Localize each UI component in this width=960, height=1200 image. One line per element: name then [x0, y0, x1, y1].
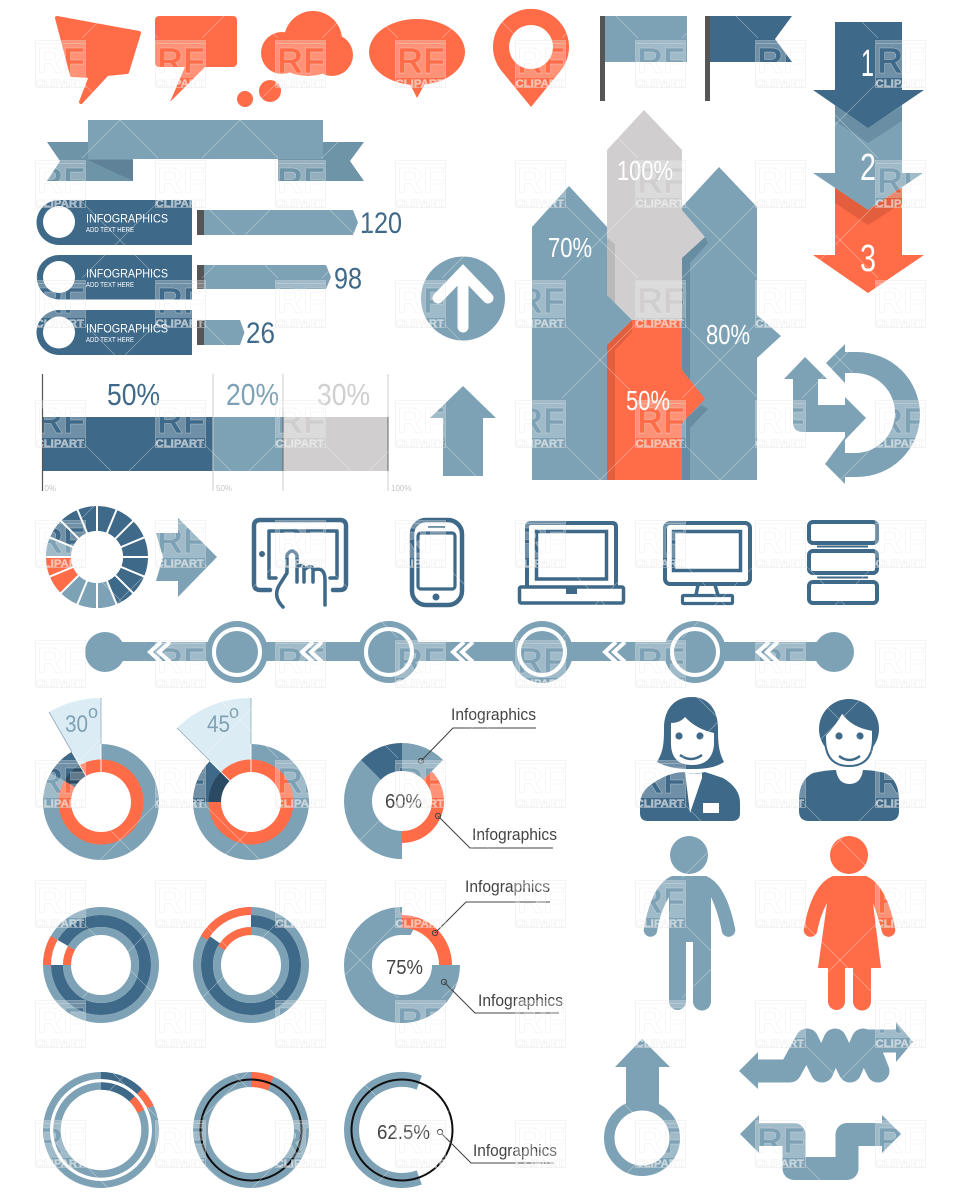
- icon: thought cloud: [237, 11, 353, 107]
- icon: wavy double arrow: [739, 1022, 913, 1089]
- numbered down arrows: 1: [861, 43, 874, 85]
- data row 26: ADD TEXT HERE: [86, 337, 134, 344]
- icon: dark flag: [705, 16, 792, 101]
- donut: 60% with callouts: Infographics: [451, 705, 536, 724]
- numbered down arrows: 3: [860, 238, 876, 280]
- stacked percentage bar: 50%: [216, 484, 232, 493]
- icon: woman avatar: [640, 697, 740, 821]
- icon: circled up arrow: [421, 256, 505, 340]
- donut: 30 degree wedge: o: [88, 702, 98, 722]
- icon: stepped double arrow: [740, 1115, 901, 1168]
- data row 98: INFOGRAPHICS: [86, 266, 168, 280]
- data row 98: ADD TEXT HERE: [86, 282, 134, 289]
- data row 120: ADD TEXT HERE: [86, 227, 134, 234]
- donut: triple ring left segment: [47, 911, 155, 1019]
- stacked percentage bar: 50%: [107, 377, 160, 412]
- icon: rectangular speech bubble: [155, 16, 237, 102]
- data row 120: INFOGRAPHICS: [86, 212, 168, 226]
- icon: server stack: [809, 522, 877, 603]
- icon: arrow with ring: [609, 1039, 675, 1171]
- numbered down arrows: [813, 22, 924, 293]
- stacked percentage bar: 30%: [317, 377, 370, 412]
- percentage arrows chart: 80%: [706, 319, 750, 350]
- icon: solid up arrow: [430, 386, 496, 476]
- donut: 75% with callouts: 75%: [386, 957, 423, 979]
- icon: laptop: [520, 523, 624, 603]
- stacked percentage bar: [42, 374, 411, 493]
- icon: curved and elbow arrows: [784, 344, 920, 484]
- percentage arrows chart: [532, 110, 781, 480]
- data row 120: [36, 200, 402, 245]
- ring: black line with orange segment: [200, 1080, 302, 1180]
- data row 98: [37, 255, 362, 300]
- ring: double thin bands: [24, 1053, 178, 1200]
- icon: female figure: [804, 836, 895, 1010]
- icon: desktop monitor: [665, 523, 750, 604]
- stacked percentage bar: 0%: [44, 484, 56, 493]
- ring: 62.5% with callout: 62.5%: [377, 1122, 430, 1144]
- donut: 60% with callouts: 60%: [385, 791, 422, 813]
- data row 26: [36, 310, 275, 355]
- donut: 75% with callouts: Infographics: [478, 991, 563, 1010]
- data row 98: 98: [334, 262, 362, 296]
- data row 26: 26: [246, 317, 275, 350]
- icon: right arrow: [156, 518, 217, 597]
- donut: 45 degree wedge: [177, 698, 309, 860]
- data row 120: 120: [360, 207, 402, 240]
- ribbon banner: [47, 120, 364, 181]
- ring: 62.5% with callout: Infographics: [473, 1141, 557, 1160]
- icon: steel flag: [600, 16, 687, 101]
- ring: 62.5% with callout: [337, 1065, 557, 1195]
- donut: 60% with callouts: Infographics: [472, 825, 557, 844]
- percentage arrows chart: 50%: [626, 385, 670, 416]
- donut: 60% with callouts: [340, 705, 557, 863]
- icon: tablet with hand: [254, 520, 346, 607]
- numbered down arrows: 2: [860, 147, 876, 189]
- percentage arrows chart: 70%: [548, 232, 592, 263]
- data row 26: INFOGRAPHICS: [86, 322, 168, 336]
- icon: angled speech bubble: [57, 18, 139, 102]
- donut: triple ring top segment: [177, 891, 325, 1039]
- donut: 45 degree wedge: 45: [207, 711, 230, 738]
- timeline: [85, 621, 854, 683]
- icon: oval speech bubble: [369, 19, 465, 98]
- percentage arrows chart: 100%: [617, 155, 673, 186]
- donut: 45 degree wedge: o: [229, 702, 239, 722]
- donut: 75% with callouts: Infographics: [465, 877, 550, 896]
- segmented ring chart: [43, 503, 151, 611]
- icon: map pin: [493, 9, 569, 107]
- stacked percentage bar: 20%: [226, 377, 279, 412]
- donut: 30 degree wedge: 30: [65, 711, 88, 738]
- donut: 30 degree wedge: [33, 698, 169, 870]
- stacked percentage bar: 100%: [391, 484, 411, 493]
- icon: man avatar: [799, 699, 899, 821]
- icon: male figure: [644, 836, 735, 1010]
- donut: 75% with callouts: [358, 877, 563, 1013]
- icon: smartphone: [412, 520, 462, 605]
